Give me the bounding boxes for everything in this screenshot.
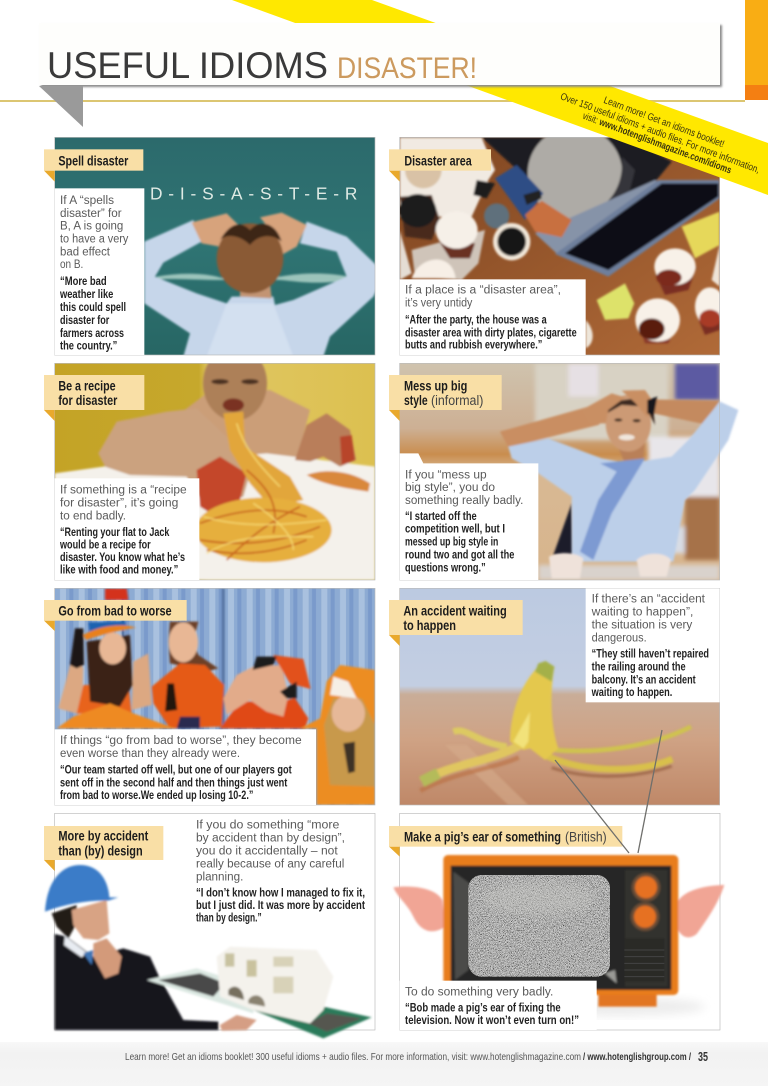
definition box: butts and rubbish everywhere.”	[405, 338, 542, 351]
definition box: “I started off the	[405, 510, 477, 523]
idiom tab: style	[404, 393, 428, 408]
definition box: television. Now it won’t even turn on!”	[405, 1014, 579, 1027]
definition text: “I don’t know how I managed to fix it,	[196, 886, 365, 899]
definition box: balcony. It’s an accident	[592, 673, 696, 686]
definition box: dangerous.	[592, 631, 647, 645]
definition box: If a place is a “disaster area”,	[405, 282, 561, 296]
definition box: “They still haven’t repaired	[592, 648, 709, 661]
definition box	[400, 981, 597, 1030]
definition box: to have a very	[60, 232, 129, 246]
definition box: If A “spells	[60, 193, 114, 207]
definition box: B, A is going	[60, 219, 123, 233]
photo: office background	[400, 363, 720, 580]
definition text: but I just did. It was more by accident	[196, 899, 365, 912]
definition text: really because of any careful	[196, 856, 344, 870]
orange corner bar	[745, 0, 768, 100]
definition box: “More bad	[60, 275, 107, 288]
definition box: If things “go from bad to worse”, they become	[60, 733, 302, 747]
definition box: the railing around the	[592, 661, 686, 674]
definition box: weather like	[59, 288, 114, 301]
definition box: questions wrong.”	[405, 561, 486, 574]
definition box	[400, 279, 586, 355]
panel outline	[400, 363, 720, 580]
definition box: would be a recipe for	[59, 538, 151, 551]
definition text: than by design.”	[196, 912, 262, 925]
definition box: sent off in the second half and then things just went	[60, 776, 287, 789]
definition box: from bad to worse.We ended up losing 10-2.”	[60, 789, 253, 802]
photo: student at chalkboard	[55, 137, 385, 357]
photo: student at chalkboard: D-I-S-A-S-T-E-R	[150, 183, 357, 203]
header bar	[39, 23, 720, 85]
definition box: round two and got all the	[405, 549, 515, 562]
photo: banana skin on wooden floor	[400, 588, 720, 805]
definition box: it’s very untidy	[405, 296, 473, 310]
photo: man asleep on messy desk	[399, 127, 725, 355]
photo: party guests in orange	[55, 588, 375, 805]
definition text: planning.	[196, 869, 243, 883]
illustration: old television with pig ears	[393, 855, 724, 1016]
definition box: competition well, but I	[405, 523, 505, 536]
figure: man with hands on head	[500, 390, 738, 578]
definition box: To do something very badly.	[405, 985, 553, 999]
panel: make a pig's ear of something	[389, 813, 726, 1030]
panel: be a recipe for disaster	[44, 363, 376, 580]
ribbon text: visit: www.hotenglishmagazine.com/idioms	[581, 111, 733, 177]
idiom tab	[44, 149, 143, 182]
panel: mess up big style	[389, 363, 739, 580]
definition box: even worse than they already were.	[60, 746, 240, 760]
definition box: farmers across	[60, 327, 124, 340]
definition box: disaster. You know what he’s	[60, 551, 185, 564]
gold header rule	[0, 100, 745, 102]
definition box: If something is a “recipe	[60, 482, 187, 496]
panel: an accident waiting to happen	[389, 588, 720, 806]
idiom tab	[389, 375, 502, 421]
definition text: by accident than by design”,	[196, 831, 345, 845]
definition box: on B.	[60, 257, 83, 271]
illustration: architect holding house model	[45, 865, 372, 1038]
panel outline	[55, 137, 375, 355]
definition box: the country.”	[60, 339, 117, 352]
footer text: Learn more! Get an idioms booklet! 300 useful idioms + audio files. For more information, visit: www.hotenglishmagazine.com	[125, 1051, 581, 1063]
definition box: “Bob made a pig’s ear of fixing the	[405, 1001, 561, 1014]
idiom tab: An accident waiting	[403, 604, 507, 619]
definition box: the situation is very	[592, 617, 693, 631]
definition box: waiting to happen.	[591, 686, 672, 699]
definition box	[55, 188, 144, 355]
title	[47, 44, 477, 86]
definition box: this could spell	[60, 301, 126, 314]
title: DISASTER!	[337, 52, 477, 85]
definition box: for disaster”, it’s going	[60, 496, 178, 510]
title: USEFUL IDIOMS	[47, 44, 328, 86]
idiom tab	[44, 375, 144, 421]
idiom tab: than (by) design	[58, 844, 143, 859]
panel outline	[55, 363, 375, 580]
panel: more by accident than by design	[43, 813, 376, 1040]
ribbon text: Learn more! Get an idioms booklet!	[602, 95, 726, 150]
definition box: to end badly.	[60, 508, 126, 522]
definition box: If there’s an “accident	[592, 591, 706, 605]
footer text: / www.hotenglishgroup.com /	[583, 1051, 691, 1063]
definition text	[196, 818, 365, 925]
definition box	[55, 478, 199, 580]
definition box: “Renting your flat to Jack	[60, 526, 170, 539]
static screen	[468, 875, 610, 977]
definition box: “After the party, the house was a	[405, 313, 547, 326]
photo: man eating spaghetti	[55, 346, 375, 580]
header fold triangle	[39, 86, 83, 127]
footer band	[0, 1042, 768, 1086]
definition text: you do it accidentally – not	[196, 844, 338, 858]
idiom tab: Go from bad to worse	[58, 604, 172, 619]
idiom tab	[389, 149, 491, 182]
definition box: “Our team started off well, but one of our players got	[60, 763, 292, 776]
figure: laughing woman in hood	[300, 665, 375, 805]
footer text: 35	[698, 1049, 708, 1064]
definition box: something really badly.	[405, 493, 523, 507]
panel outline	[400, 137, 720, 355]
definition box	[400, 453, 538, 580]
definition box: disaster area with dirty plates, cigarette	[405, 326, 577, 339]
idiom tab: Disaster area	[404, 154, 472, 169]
idiom tab: (British)	[565, 830, 607, 845]
definition box: big style”, you do	[405, 480, 495, 494]
idiom tab: Spell disaster	[58, 154, 129, 169]
panel outline	[55, 588, 375, 805]
idiom tab: to happen	[403, 618, 456, 633]
idiom tab	[44, 600, 187, 631]
definition box	[586, 588, 720, 702]
panel: disaster area	[389, 137, 720, 356]
panel outline	[55, 813, 375, 1030]
idiom tab	[389, 826, 622, 857]
definition box: disaster for	[60, 314, 110, 327]
definition box: messed up big style in	[405, 536, 498, 549]
definition text: If you do something “more	[196, 818, 339, 832]
panel: go from bad to worse	[44, 588, 376, 806]
idiom tab: Make a pig’s ear of something	[404, 830, 561, 845]
idiom tab: Be a recipe	[58, 379, 116, 394]
idiom tab: for disaster	[58, 393, 118, 408]
definition box	[55, 729, 316, 805]
definition box: like with food and money.”	[60, 564, 178, 577]
definition box: bad effect	[60, 244, 111, 258]
idiom tab: Mess up big	[404, 379, 467, 394]
idiom tab	[389, 600, 523, 646]
idiom tab	[44, 826, 163, 871]
panel outline	[400, 813, 720, 1030]
idiom tab: (informal)	[431, 393, 483, 408]
panel outline	[400, 588, 720, 805]
idiom tab: More by accident	[58, 829, 149, 844]
definition box: waiting to happen”,	[591, 604, 693, 618]
definition box: disaster” for	[60, 206, 122, 220]
panel: spell disaster	[44, 137, 376, 356]
definition box: If you “mess up	[405, 467, 487, 481]
